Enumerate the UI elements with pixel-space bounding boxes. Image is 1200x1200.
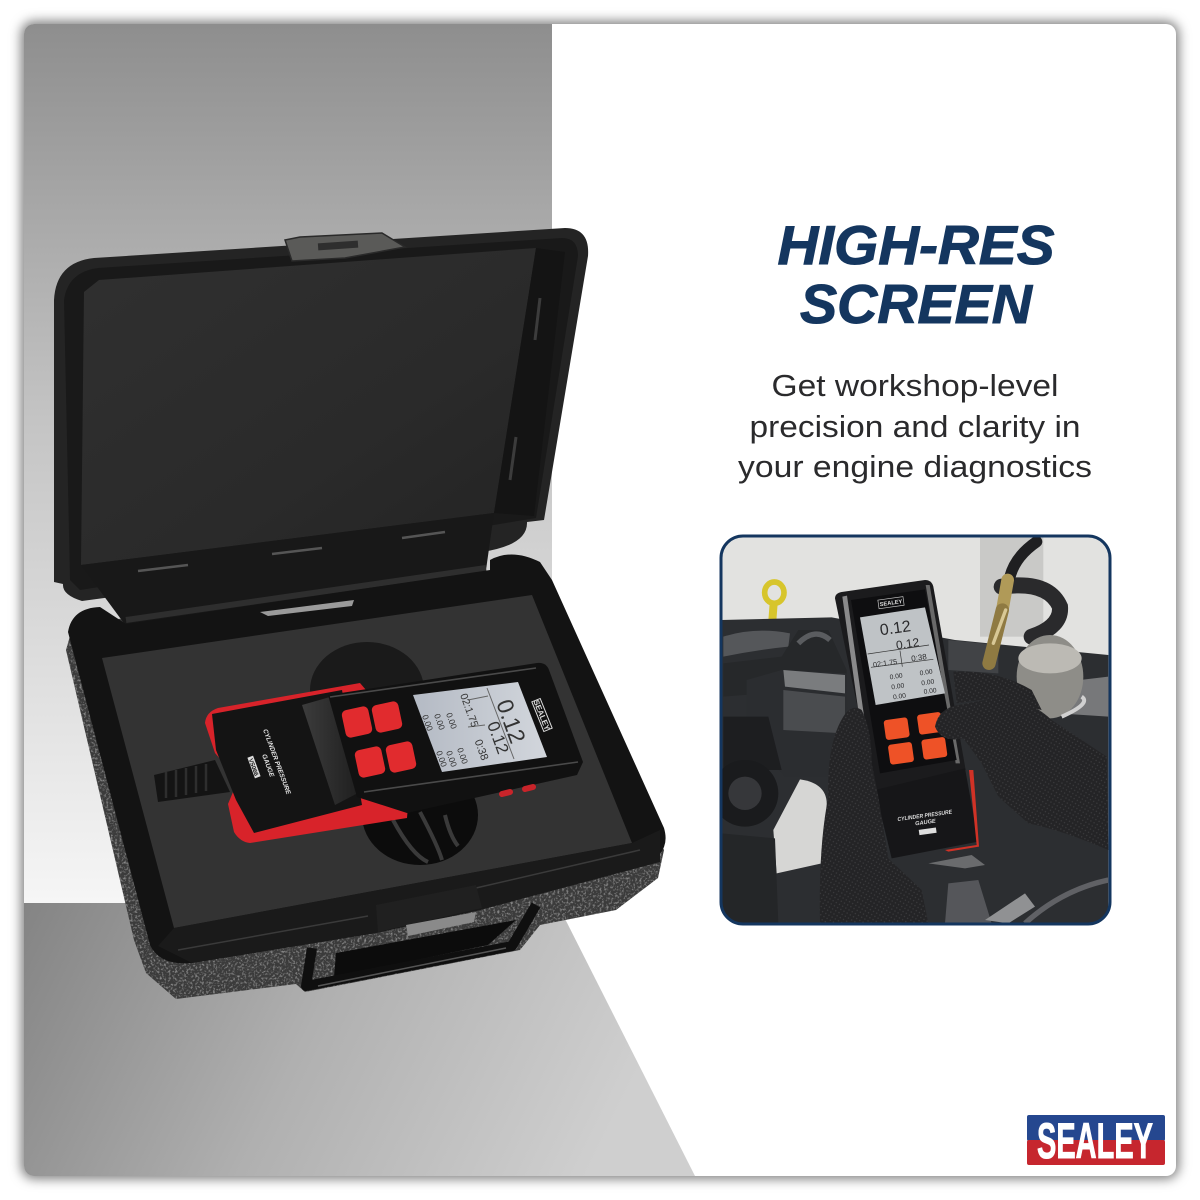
gauge rear body: CYLINDER PRESSURE xyxy=(261,728,292,796)
pressure hose xyxy=(989,542,1060,663)
gauge display: 0.00 xyxy=(921,679,935,687)
lid latch xyxy=(285,233,405,261)
gauge rear body xyxy=(205,683,408,843)
foam insert xyxy=(102,595,632,928)
description text: Get workshop-level xyxy=(772,368,1058,403)
gauge buttons xyxy=(883,712,948,765)
gauge label: GAUGE xyxy=(915,819,936,827)
product: open carry case with gauge xyxy=(54,228,666,999)
description text: your engine diagnostics xyxy=(738,449,1092,484)
gauge screen: 0.00 xyxy=(444,711,459,730)
gauge screen: 0.00 xyxy=(455,746,470,765)
description text xyxy=(738,368,1092,484)
yellow dipstick xyxy=(765,582,784,621)
hinge highlight xyxy=(260,600,354,616)
gauge SEALEY badge: SEALEY xyxy=(880,599,903,608)
inset photo: gauge in use on engine xyxy=(712,530,1115,930)
heading: SCREEN xyxy=(800,273,1033,335)
gauge display xyxy=(860,607,945,705)
gauge screen: 0.00 xyxy=(434,749,449,768)
gauge label xyxy=(897,810,953,835)
gauge screen: 0.00 xyxy=(432,712,447,731)
gauge screen: 0.12 xyxy=(491,696,531,747)
gauge display: 0.00 xyxy=(923,687,937,696)
case body xyxy=(66,590,664,999)
gloved right hand xyxy=(935,698,1108,850)
gauge screen xyxy=(413,682,547,772)
gauge screen: 0:38 xyxy=(472,738,490,762)
gauge display: 0:38 xyxy=(911,652,928,663)
gauge label: CYLINDER PRESSURE xyxy=(897,810,953,823)
gauge SEALEY badge: SEALEY xyxy=(531,699,552,732)
gauge display: 0.00 xyxy=(919,669,933,677)
gauge SEALEY badge xyxy=(878,597,904,609)
gauge buttons xyxy=(341,700,417,779)
case rim xyxy=(68,554,666,963)
gauge screen: 0.00 xyxy=(444,749,459,768)
gloved left hand xyxy=(820,708,928,923)
gauge screen: 0.12 xyxy=(483,719,512,756)
gauge display: 02:1.75 xyxy=(872,657,898,669)
gauge front plate xyxy=(302,663,583,813)
heading xyxy=(778,214,1055,335)
gauge display: 0.00 xyxy=(891,683,905,691)
engine bay xyxy=(712,617,1108,923)
description text: precision and clarity in xyxy=(750,409,1080,444)
photo frame xyxy=(721,536,1110,924)
gauge rear body: GAUGE xyxy=(260,753,275,779)
fuel pump canister xyxy=(1017,635,1084,718)
gauge display: 0.12 xyxy=(895,635,921,652)
cable strain relief xyxy=(154,760,230,802)
gauge rear body: VS066 xyxy=(247,758,259,778)
left background panel xyxy=(24,24,695,1176)
gauge screen: 0.00 xyxy=(420,713,435,732)
gauge screen: 02:1.75 xyxy=(457,692,480,729)
gauge display: 0.12 xyxy=(879,618,912,639)
workshop wall xyxy=(722,538,1108,904)
heading: HIGH-RES xyxy=(778,214,1055,276)
gauge upper body xyxy=(835,580,979,858)
cable cutout xyxy=(310,642,478,865)
palm behind gauge xyxy=(953,672,1042,710)
case front lip and handle xyxy=(158,830,660,986)
gauge display: 0.00 xyxy=(889,673,903,681)
gauge display: 0.00 xyxy=(893,693,907,701)
gauge side buttons xyxy=(502,787,533,794)
case lid xyxy=(54,228,588,632)
